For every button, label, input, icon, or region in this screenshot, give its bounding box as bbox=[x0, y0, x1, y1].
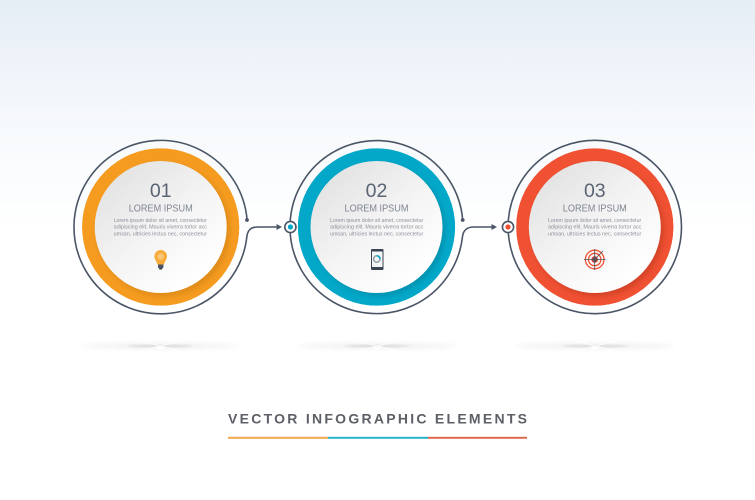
title: VECTOR INFOGRAPHIC ELEMENTS bbox=[228, 410, 527, 426]
number: 02 bbox=[366, 180, 387, 202]
panel: step 01 bbox=[74, 140, 282, 314]
red ring bbox=[516, 148, 674, 306]
body text: Lorem ipsum dolor sit amet, consectetur bbox=[114, 218, 207, 224]
body text: adipiscing elit. Mauris viverra tortor acc bbox=[548, 225, 642, 231]
connector node blue bbox=[285, 221, 296, 233]
floor shadow 3 bbox=[515, 341, 675, 351]
floor shadow 2 bbox=[297, 341, 457, 351]
body text: adipiscing elit. Mauris viverra tortor acc bbox=[330, 225, 424, 231]
panel: step 03 bbox=[502, 140, 682, 314]
orange ring bbox=[82, 148, 239, 306]
floor shadow 1 bbox=[80, 341, 240, 351]
outer ring bbox=[508, 140, 682, 314]
number: 03 bbox=[584, 180, 606, 202]
outer ring with connector arrow bbox=[290, 141, 497, 314]
background bbox=[0, 0, 755, 235]
outer ring with connector arrow bbox=[74, 140, 282, 314]
number: 01 bbox=[150, 180, 172, 202]
inner disc bbox=[529, 161, 661, 293]
body text: adipiscing elit. Mauris viverra tortor acc bbox=[114, 225, 207, 231]
heading: LOREM IPSUM bbox=[344, 203, 408, 215]
icon: smartphone bbox=[371, 249, 384, 270]
tricolor underline bbox=[228, 437, 527, 439]
icon: target bbox=[584, 249, 606, 270]
inner disc bbox=[310, 161, 442, 293]
body text bbox=[114, 218, 207, 237]
body text: umsan, ultricies lectus nec, consectetur bbox=[548, 231, 642, 237]
body text: Lorem ipsum dolor sit amet, consectetur bbox=[330, 218, 424, 224]
heading: LOREM IPSUM bbox=[563, 203, 627, 215]
inner disc bbox=[95, 161, 227, 293]
icon: light bulb bbox=[154, 250, 167, 270]
heading: LOREM IPSUM bbox=[129, 203, 193, 215]
body text bbox=[548, 218, 642, 237]
body text: umsan, ultricies lectus nec, consectetur bbox=[114, 231, 207, 237]
connector node red bbox=[502, 221, 514, 233]
panel: step 02 bbox=[285, 141, 497, 314]
blue ring bbox=[298, 148, 455, 306]
body text: umsan, ultricies lectus nec, consectetur bbox=[330, 231, 424, 237]
body text bbox=[330, 218, 424, 237]
body text: Lorem ipsum dolor sit amet, consectetur bbox=[548, 218, 642, 224]
